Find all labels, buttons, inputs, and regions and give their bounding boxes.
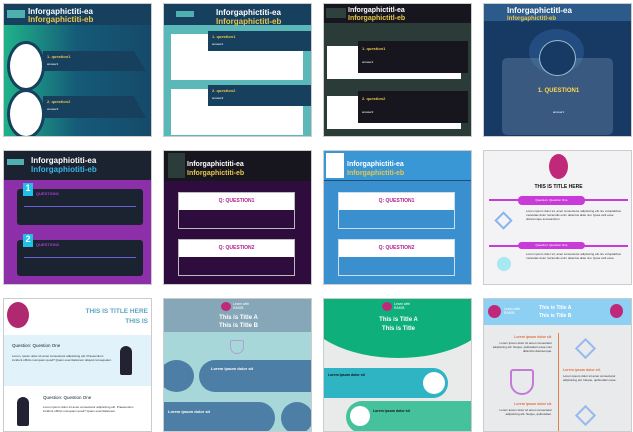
tile 3: dark boxes: Inforgaphictitl-eb [348, 15, 405, 22]
tile 9: title here with people [3, 298, 152, 432]
tile 12: timeline: Lorem ipsum dolor sit. [514, 402, 552, 406]
tile 12: timeline: RAKIB [504, 311, 515, 315]
tile 4: dark blue circle: 1. QUESTION1 [538, 88, 579, 94]
tile 12: timeline: This is Title A [539, 305, 571, 311]
tile 7: blue: Q: QUESTION1 [379, 198, 414, 204]
tile 7: blue: Inforgaphictiti-eb [347, 170, 404, 177]
tile 5: purple: Inforgaphiotiti-ea [31, 156, 96, 165]
tile 12: timeline: Lorem ipsum dolor sit. [563, 368, 601, 372]
tile 6: dark purple: Inforgaphictiti-eb [187, 170, 244, 177]
tile 4: dark blue circle: Inforgaphictitl-ea [507, 6, 572, 15]
tile 12: timeline: This is Title B [539, 313, 571, 319]
tile 11: green: RAKIB [394, 306, 405, 310]
tile 9: title here with people: Question: Question One [43, 395, 91, 400]
tile 8: white title: Lorem ipsum dolor sit, amet consectetur adipisicing elit. Ex voluptatibus molestias dolor reiciendis enim delectus alias nisi. Quas velit esse. [526, 252, 621, 260]
tile 1: teal circles: Inforgaphictiti-eb [28, 15, 93, 24]
tile 9: title here with people: Lorem, ipsum dolor sit amet consectetur adipisicing elit. Praesentium incidunt officiis numquam quod? Quam exercitationem aliquid consequatur. [12, 354, 112, 362]
tile 9: title here with people: Question: Question One [12, 343, 60, 348]
tile 6: dark purple: Q: QUESTION1 [219, 198, 254, 204]
tile 11: green: Lorem ipsum dolor sit [328, 373, 365, 377]
tile 5: purple: Inforgaphiotiti-eb [31, 165, 97, 174]
tile 10: grey-blue pills: Lorem ipsum dolor sit [168, 409, 210, 414]
tile 1: teal circles: answer1 [47, 62, 58, 66]
tile 8: white title [483, 150, 632, 285]
tile 1: teal circles: 1. question1 [47, 54, 70, 59]
tile 9: title here with people: THIS IS TITLE HERE [86, 308, 148, 315]
tile 5: purple: QUESTION2 [36, 242, 59, 247]
tile 12: timeline: Learn with [504, 307, 520, 311]
tile 3: dark boxes [323, 3, 472, 137]
tile 2: light teal boxes: Inforgaphictiti-ea [216, 8, 281, 17]
tile 10: grey-blue pills: Learn with [233, 302, 249, 306]
tile 5: purple: 2 [25, 234, 30, 244]
tile 5: purple: QUESTION1 [36, 191, 59, 196]
tile 12: timeline [483, 298, 632, 432]
tile 10: grey-blue pills: This is Title B [219, 323, 258, 329]
tile 2: light teal boxes: answer1 [212, 42, 223, 46]
tile 10: grey-blue pills: This is Title A [219, 315, 258, 321]
tile 12: timeline: Lorem ipsum dolor sit amet consectetur adipisicing elit. Neque, quibusdam esse. [563, 374, 617, 382]
tile 5: purple [3, 150, 152, 285]
tile 12: timeline: Lorem ipsum dolor sit amet consectetur adipisicing elit. Neque, quibusdam. [499, 408, 552, 416]
tile 1: teal circles: 2. question2 [47, 99, 70, 104]
tile 1: teal circles [3, 3, 152, 137]
tile 8: white title: THIS IS TITLE HERE [534, 184, 583, 190]
tile 11: green: Lorem ipsum dolor sit [373, 409, 410, 413]
tile 8: white title: Question: Question One [535, 198, 568, 202]
tile 2: light teal boxes: answer2 [212, 96, 223, 100]
tile 3: dark boxes: Inforgaphictitl-ea [348, 7, 405, 14]
tile 8: white title: Lorem ipsum dolor sit, amet consectetur adipisicing elit. Ex voluptatibus molestias dolor reiciendis enim delectus alias nisi. Quas velit esse doloremque accusantium. [526, 209, 621, 221]
tile 12: timeline: Lorem ipsum dolor sit. [514, 335, 552, 339]
tile 3: dark boxes: answer2 [362, 110, 373, 114]
tile 11: green: Learn with [394, 302, 410, 306]
tile 11: green [323, 298, 472, 432]
tile 2: light teal boxes [163, 3, 312, 137]
tile 4: dark blue circle [483, 3, 632, 137]
tile 2: light teal boxes: 2. question2 [212, 88, 235, 93]
tile 4: dark blue circle: Inforgaphictitl-eb [507, 16, 556, 22]
tile 2: light teal boxes: Inforgaphictitl-eb [216, 17, 281, 26]
tile 11: green: This is Title [382, 326, 415, 332]
tile 8: white title: Question: Question One [535, 243, 568, 247]
tile 3: dark boxes: 2. question2 [362, 96, 385, 101]
tile 7: blue: Inforgaphictiti-ea [347, 161, 404, 168]
tile 7: blue: Q: QUESTION2 [379, 245, 414, 251]
tile 11: green: This is Title A [379, 317, 418, 323]
tile 1: teal circles: answer2 [47, 107, 58, 111]
tile 6: dark purple [163, 150, 312, 285]
tile 1: teal circles: Inforgaphictiti-ea [28, 7, 93, 16]
tile 10: grey-blue pills: RAKIB [233, 306, 244, 310]
tile 2: light teal boxes: 1. question1 [212, 34, 235, 39]
tile 6: dark purple: Inforgaphictiti-ea [187, 161, 244, 168]
tile 10: grey-blue pills: Lorem ipsum dolor sit [211, 366, 253, 371]
tile 12: timeline: Lorem ipsum dolor sit amet consectetur adipisicing elit. Neque, quibusdam esse cum distinctio doloremque. [493, 341, 552, 353]
tile 7: blue [323, 150, 472, 285]
tile 9: title here with people: Lorem ipsum dolor sit amet consectetur adipisicing elit. Praesentium incidunt officiis numquam quod? Quam exercitationem. [43, 405, 134, 413]
tile 9: title here with people: THIS IS [125, 318, 148, 325]
tile 10: grey-blue pills [163, 298, 312, 432]
tile 4: dark blue circle: answer1 [553, 110, 564, 114]
tile 6: dark purple: Q: QUESTION2 [219, 245, 254, 251]
tile 5: purple: 1 [25, 183, 30, 193]
tile 3: dark boxes: 1. question1 [362, 46, 385, 51]
tile 3: dark boxes: answer1 [362, 60, 373, 64]
